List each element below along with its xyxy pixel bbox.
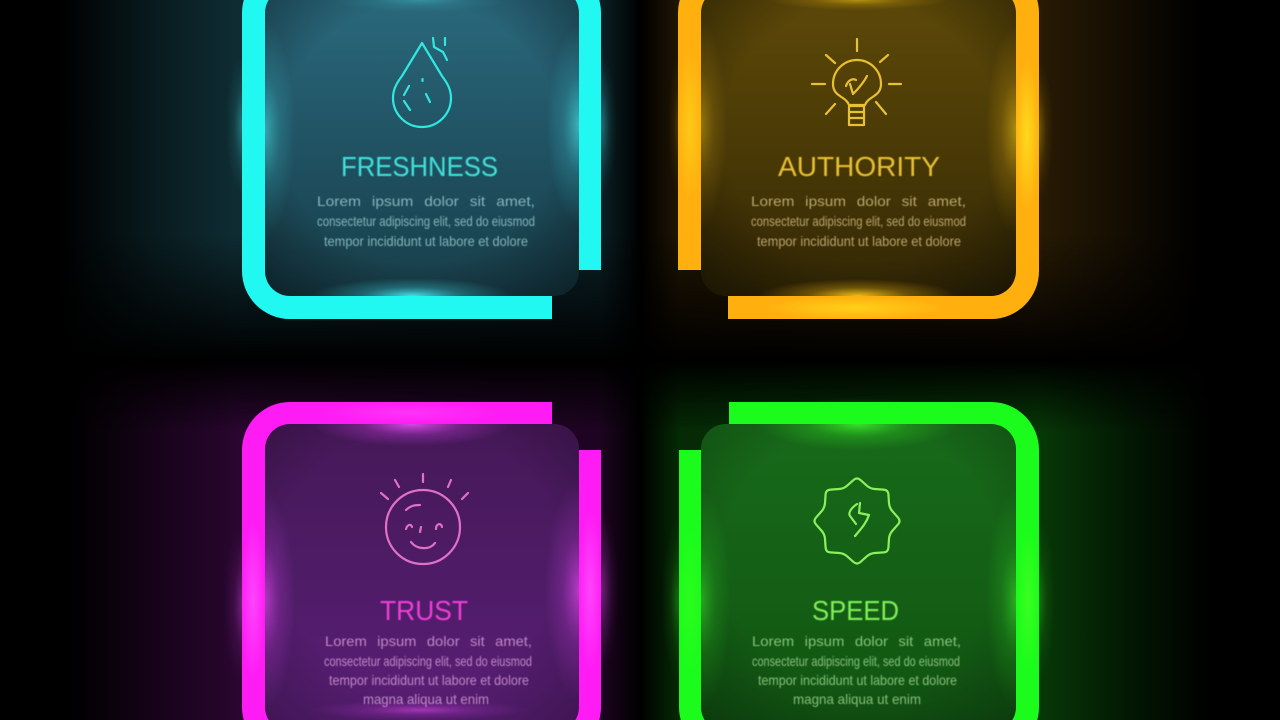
neon frame (242, 402, 601, 720)
body text: magna aliqua ut enim (363, 691, 489, 707)
body text: tempor incididunt ut labore et dolore (329, 672, 529, 688)
panel fill (260, 424, 579, 720)
body text: consectetur adipiscing elit, sed do eiusmod (751, 213, 966, 229)
panel fill (701, 424, 1020, 720)
body text: tempor incididunt ut labore et dolore (758, 672, 957, 688)
icon: water drop (393, 38, 451, 127)
inner glow highlights (224, 402, 619, 720)
body text: consectetur adipiscing elit, sed do eiusmod (752, 653, 960, 669)
inner glow highlights (662, 398, 1055, 710)
body text: Lorem ipsum dolor sit amet, (751, 193, 966, 209)
heading: AUTHORITY (778, 151, 940, 182)
inner glow highlights (668, 0, 1053, 313)
neon frame (678, 0, 1039, 319)
body text (751, 193, 966, 249)
frame hot spots (679, 530, 1039, 670)
neon frame (679, 402, 1039, 720)
icon: light bulb (812, 39, 901, 125)
heading: TRUST (380, 595, 468, 626)
panel: freshness (226, 0, 617, 319)
body text (317, 193, 535, 249)
background glow: green (640, 360, 1210, 720)
body text: Lorem ipsum dolor sit amet, (317, 193, 535, 209)
background glow: teal (86, 0, 631, 338)
body text: tempor incididunt ut labore et dolore (757, 233, 961, 249)
body text: consectetur adipiscing elit, sed do eiusmod (324, 653, 532, 669)
body text: Lorem ipsum dolor sit amet, (752, 633, 961, 649)
panel vignette (701, 424, 1020, 720)
background glow: amber (650, 0, 1167, 334)
icon: lightning badge (814, 478, 900, 564)
panel fill (701, 0, 1020, 296)
body text: Lorem ipsum dolor sit amet, (325, 633, 532, 649)
panel fill (260, 0, 579, 296)
inner glow highlights (226, 0, 617, 314)
body text: tempor incididunt ut labore et dolore (324, 233, 528, 249)
neon frame (242, 0, 601, 319)
background glow: purple (70, 360, 640, 720)
panel vignette (701, 0, 1020, 296)
frame hot spots (241, 402, 602, 680)
body text: consectetur adipiscing elit, sed do eiusmod (317, 213, 535, 229)
panel vignette (260, 0, 579, 296)
panel vignette (260, 424, 579, 720)
frame hot spots (678, 50, 1039, 319)
panel: trust (224, 402, 619, 720)
heading: SPEED (812, 595, 899, 626)
heading: FRESHNESS (341, 151, 498, 182)
panel: speed (662, 398, 1055, 720)
body text: magna aliqua ut enim (793, 691, 921, 707)
body text (324, 633, 532, 707)
body text (752, 633, 961, 707)
panel: authority (668, 0, 1053, 319)
icon: smiling face (381, 474, 468, 564)
